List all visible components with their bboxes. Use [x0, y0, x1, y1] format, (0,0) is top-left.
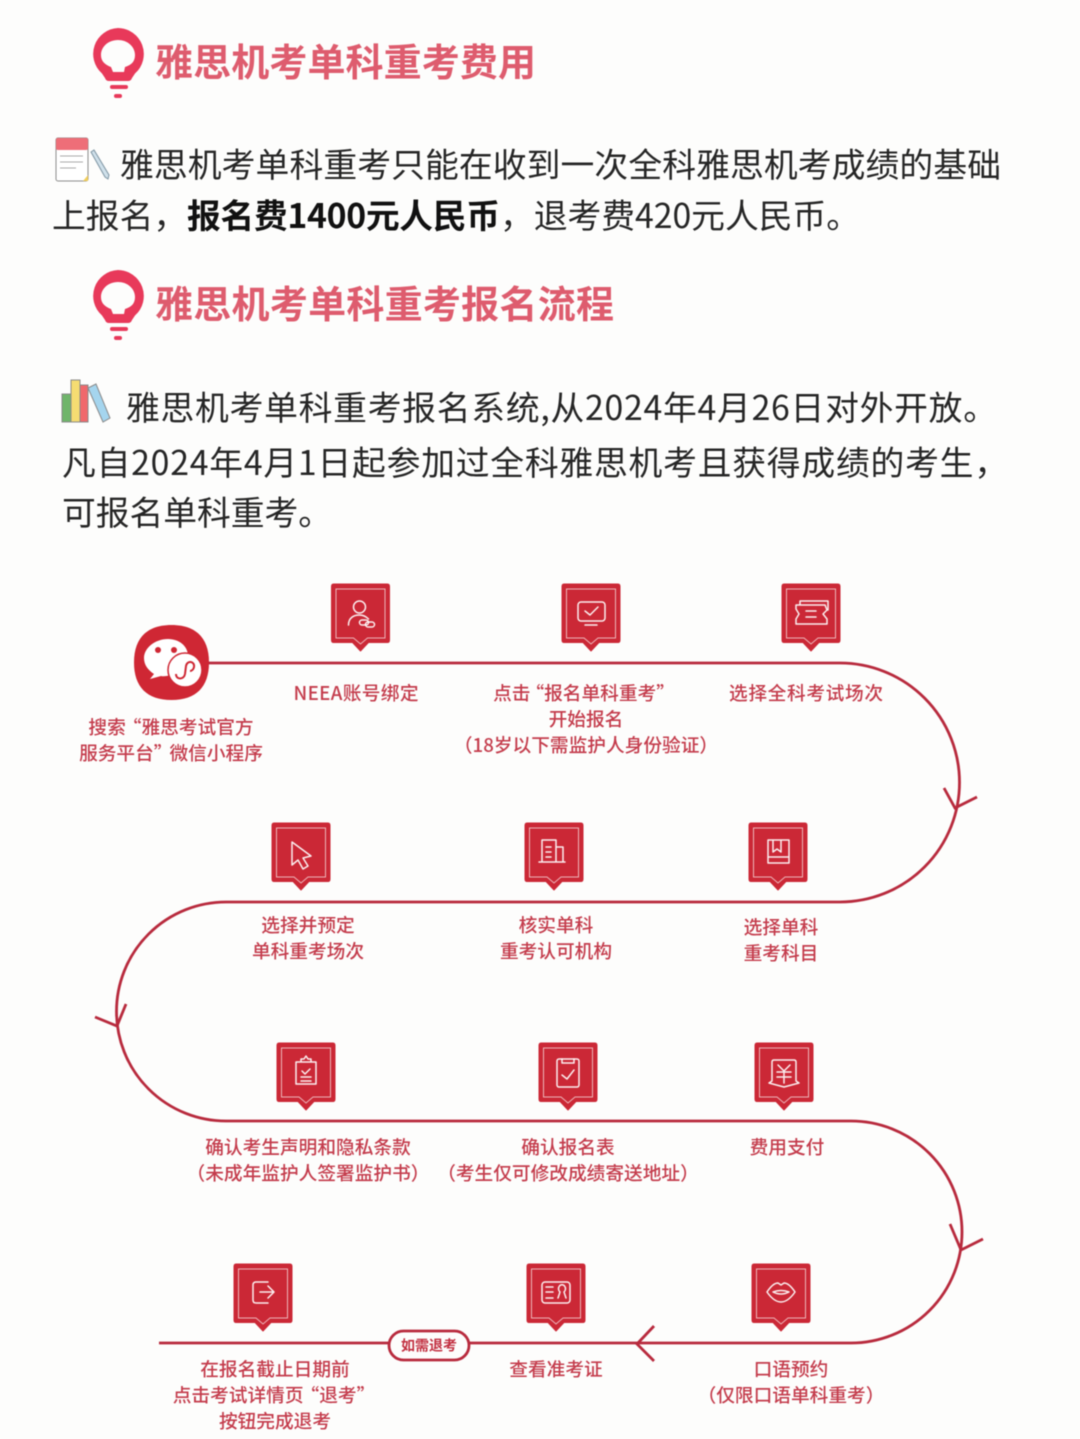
label: 在报名截止日期前 [200, 1355, 350, 1382]
text block: fee description: 上报名， [52, 189, 187, 238]
step: confirm declaration [187, 1043, 429, 1186]
step: withdraw [173, 1264, 375, 1434]
arrow: right curve two [950, 1224, 983, 1250]
label: 重考科目 [744, 939, 818, 966]
text block: registration description: 雅思机考单科重考报名系统,从2024年4月26日对外开放。 [126, 381, 997, 430]
label: （18岁以下需监护人身份验证） [454, 731, 718, 758]
text block: fee description: 报名费1400元人民币 [187, 189, 500, 238]
section heading: fees [93, 28, 536, 98]
badge: withdraw if needed: 如需退考 [401, 1336, 457, 1356]
flow line [95, 663, 983, 1361]
label: 口语预约 [754, 1355, 828, 1382]
step: verify institution [500, 823, 612, 964]
marker: ID card [527, 1264, 585, 1331]
arrow: right curve one [944, 788, 977, 808]
label: 单科重考场次 [252, 937, 364, 964]
label: （考生仅可修改成绩寄送地址） [437, 1159, 699, 1186]
step: confirm registration form [437, 1043, 699, 1186]
text block: registration description: 可报名单科重考。 [62, 486, 332, 535]
label: 搜索“雅思考试官方 [88, 713, 254, 740]
arrow: left curve [95, 1004, 126, 1026]
step: admission ticket [509, 1264, 603, 1382]
label: 服务平台”微信小程序 [79, 739, 263, 766]
step: NEEA account [294, 584, 419, 706]
label: 选择单科 [744, 913, 819, 940]
step: choose full exam session [729, 584, 883, 706]
label: 点击“报名单科重考” [493, 679, 675, 706]
label: 费用支付 [750, 1133, 824, 1160]
step: choose module [744, 823, 819, 966]
marker: book [749, 823, 807, 890]
label: 选择并预定 [261, 911, 355, 938]
step: payment [750, 1043, 824, 1160]
step: click register [454, 584, 718, 758]
label: （仅限口语单科重考） [698, 1381, 884, 1408]
label: 查看准考证 [509, 1355, 603, 1382]
label: NEEA账号绑定 [294, 679, 419, 706]
step: speaking booking [698, 1264, 884, 1408]
marker: building [525, 823, 583, 890]
label: 重考认可机构 [500, 937, 612, 964]
arrow: bottom line [637, 1326, 654, 1361]
marker: lips [752, 1264, 810, 1331]
label: 选择全科考试场次 [729, 679, 883, 706]
marker: clipboard list [277, 1043, 335, 1110]
marker: cursor [272, 823, 330, 890]
heading text: 雅思机考单科重考报名流程 [155, 274, 614, 329]
icon: light bulb [93, 270, 144, 340]
icon: books [62, 380, 110, 422]
label: （未成年监护人签署监护书） [187, 1159, 429, 1186]
text block: fee description: ，退考费420元人民币。 [500, 189, 860, 238]
icon: WeChat mini program [134, 625, 209, 700]
marker: ticket [782, 584, 840, 651]
heading text: 雅思机考单科重考费用 [155, 32, 536, 87]
step: book single-module session [252, 823, 364, 964]
label: 按钮完成退考 [219, 1407, 331, 1434]
label: 核实单科 [519, 911, 594, 938]
marker: exit arrow [234, 1264, 292, 1331]
label: 确认考生声明和隐私条款 [205, 1133, 411, 1160]
text block: fee description: 雅思机考单科重考只能在收到一次全科雅思机考成绩的基础 [120, 138, 1001, 187]
section heading: registration process [93, 270, 614, 340]
label: 点击考试详情页“退考” [173, 1381, 375, 1408]
marker: yuan [755, 1043, 813, 1110]
text block: registration description [62, 381, 1008, 535]
icon: notepad and pencil [56, 138, 109, 181]
text block: registration description: 凡自2024年4月1日起参加过全科雅思机考且获得成绩的考生， [62, 436, 1008, 485]
label: 开始报名 [549, 705, 623, 732]
marker: clipboard check [539, 1043, 597, 1110]
icon: light bulb [93, 28, 144, 98]
label: 确认报名表 [521, 1133, 615, 1160]
marker: person with link [332, 584, 390, 651]
text block: fee description [52, 138, 1001, 238]
step: search mini program [79, 625, 263, 766]
marker: monitor check [562, 584, 620, 651]
badge: withdraw if needed [389, 1331, 469, 1360]
